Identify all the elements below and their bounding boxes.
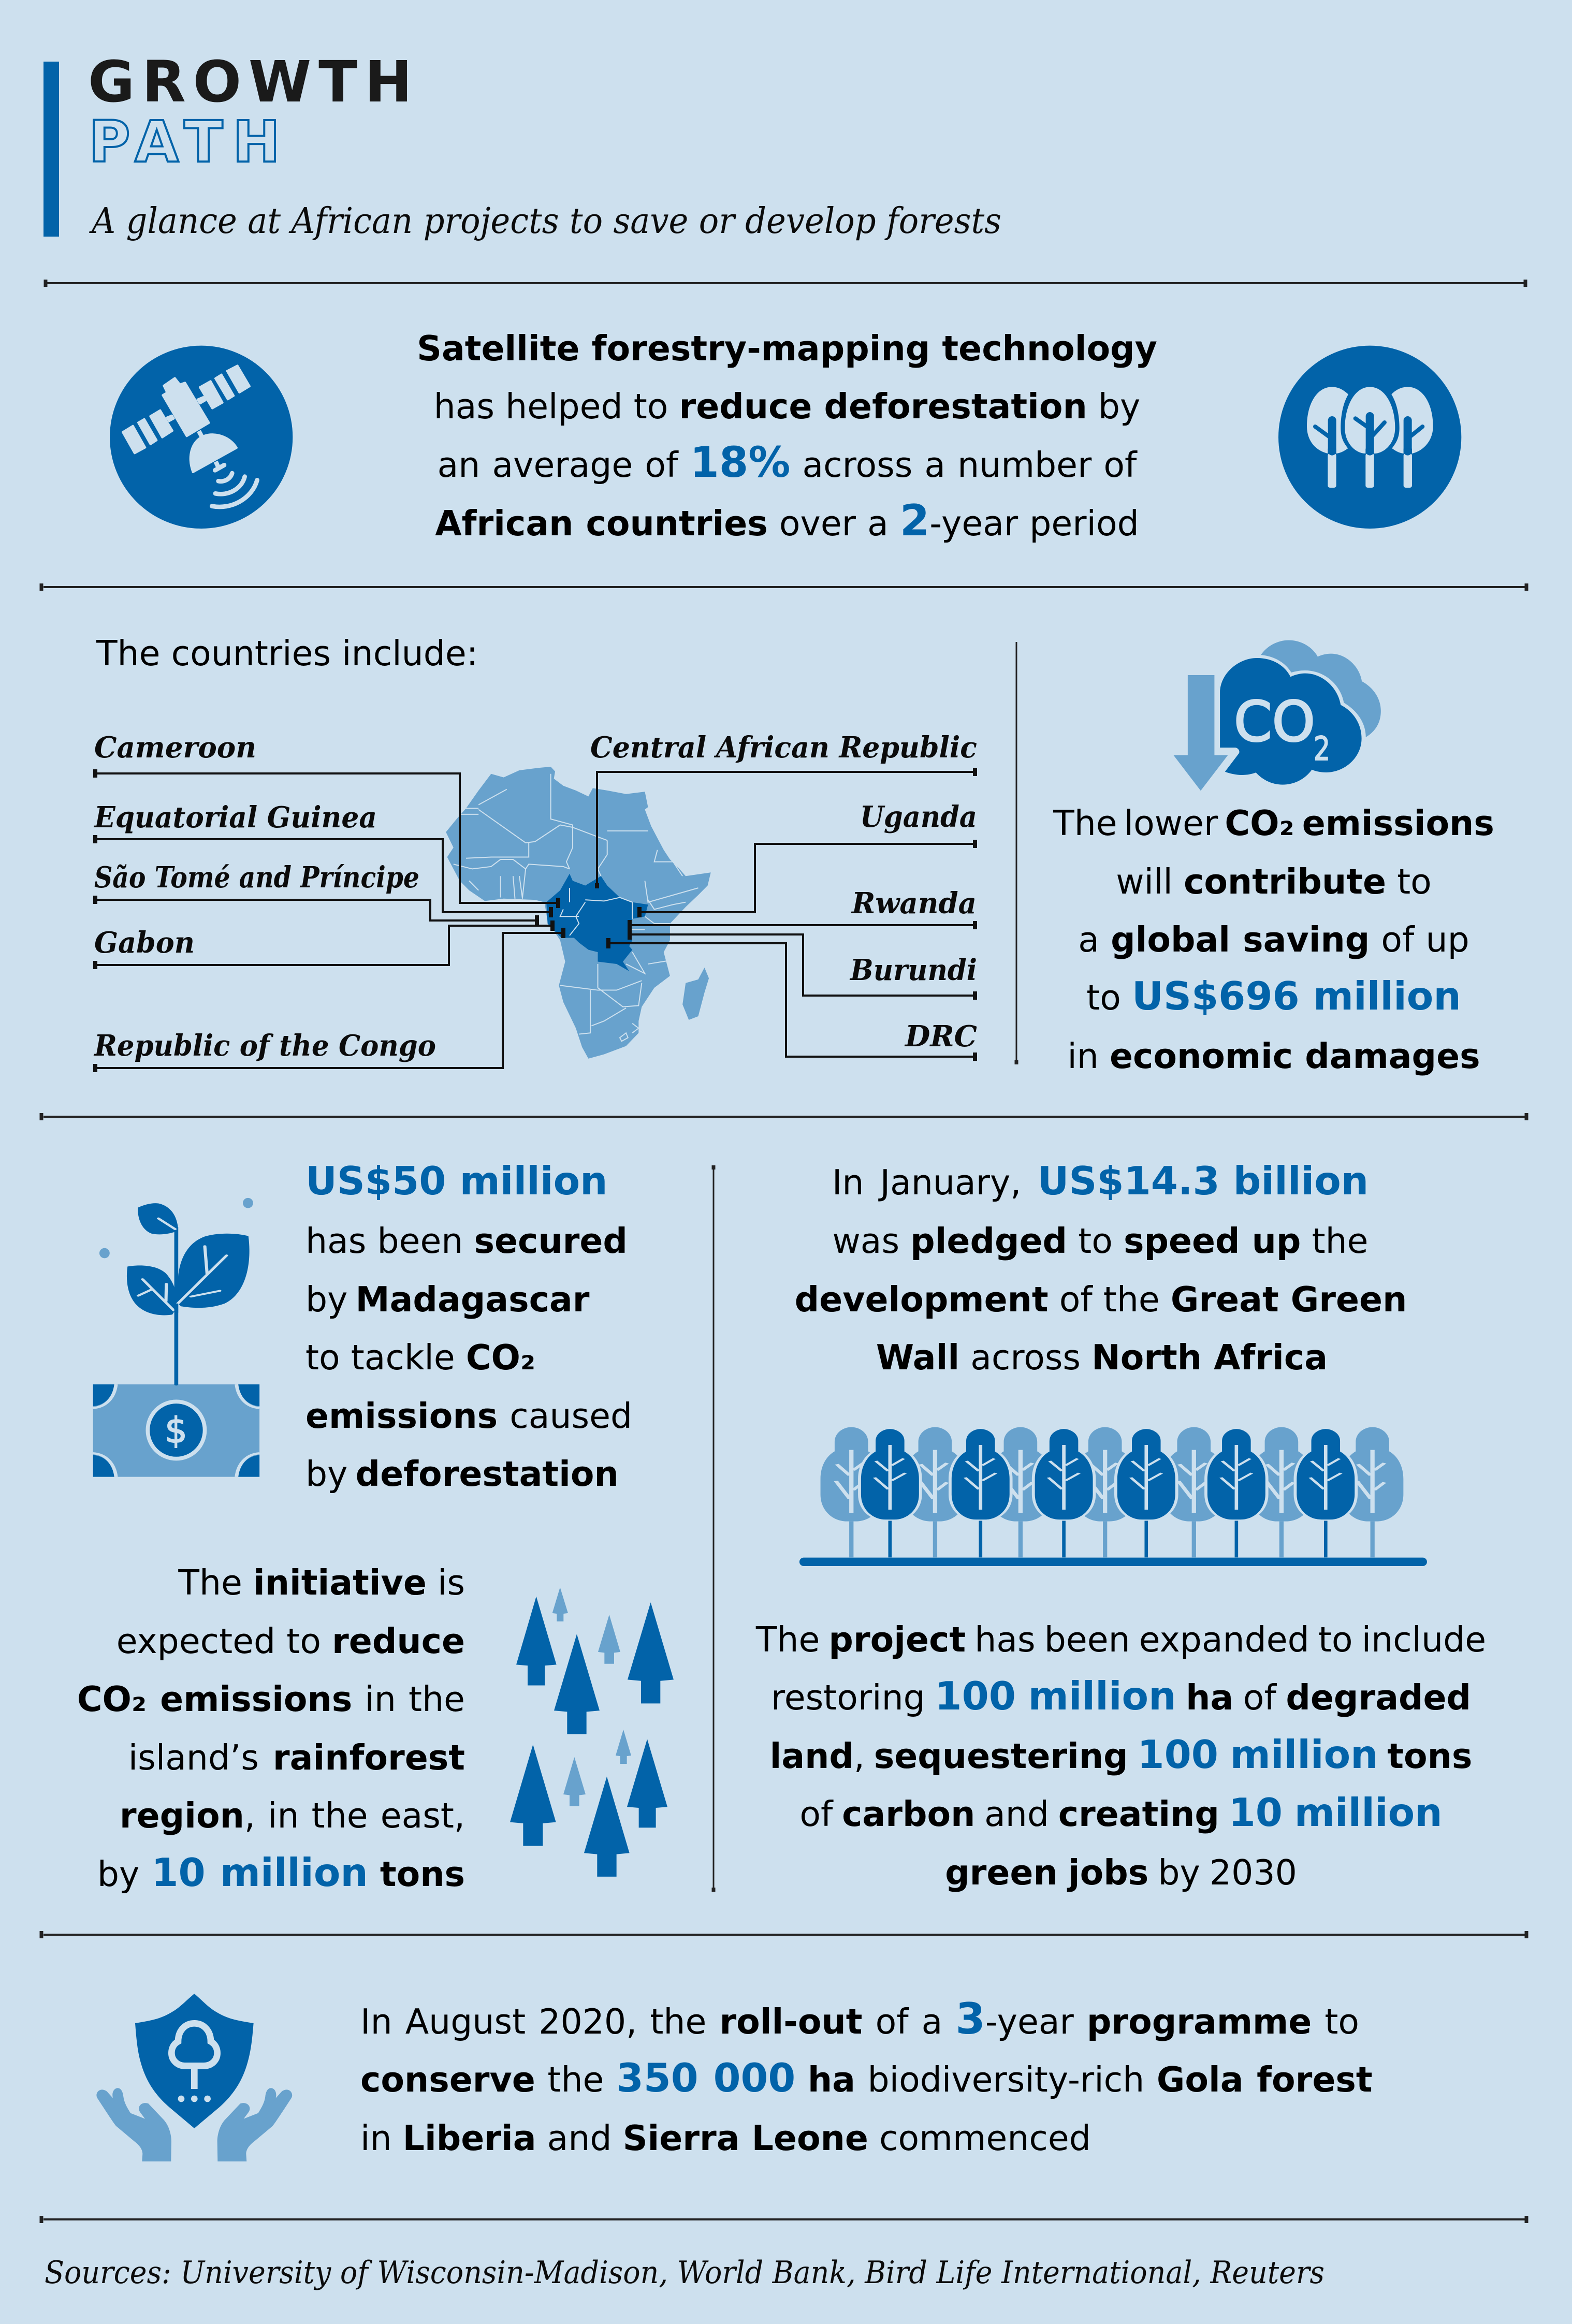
text: Great Green Wall pledge: development of the Great Green <box>795 1279 1407 1320</box>
label: Burundi: Burundi <box>849 953 977 987</box>
text: Gola forest: In August 2020, the roll-out of a 3-year programme to <box>360 1994 1359 2044</box>
text: CO2 savings: will contribute to <box>1116 861 1432 902</box>
label: DRC: DRC <box>904 1019 977 1054</box>
text: Madagascar funding: US$50 million <box>305 1158 607 1204</box>
text: Gola forest <box>360 1994 1373 2158</box>
text: project expansion: of carbon and creating 10 million <box>799 1790 1443 1835</box>
text: Gola forest: in Liberia and Sierra Leone commenced <box>360 2118 1091 2158</box>
label: Central African Republic <box>590 730 977 888</box>
text: satellite technology: an average of 18% across a number of <box>438 439 1138 487</box>
label: São Tomé and Príncipe <box>93 860 539 926</box>
text: initiative: CO₂ emissions in the <box>77 1679 465 1719</box>
sources: Sources: University of Wisconsin-Madison, World Bank, Bird Life International, Reuters <box>45 2255 1324 2291</box>
icon: plant growing from money: $ <box>165 1410 187 1451</box>
title block <box>43 49 1001 242</box>
text: Madagascar funding: by deforestation <box>305 1454 619 1494</box>
text: Madagascar funding: to tackle CO₂ <box>305 1337 535 1378</box>
title block: A glance at African projects to save or develop forests <box>89 201 1001 242</box>
label: Cameroon: Cameroon <box>94 730 256 765</box>
text: Great Green Wall pledge: In January, US$14.3 billion <box>832 1158 1369 1204</box>
text: initiative: region, in the east, <box>120 1795 465 1836</box>
icon: CO2 cloud and arrow: CO <box>1234 690 1315 754</box>
text: project expansion <box>755 1619 1486 1893</box>
icon: row of trees on green wall <box>799 1427 1427 1566</box>
label: Central African Republic: Central African Republic <box>590 730 977 765</box>
text: initiative: by 10 million tons <box>97 1850 465 1895</box>
icon: CO2 cloud and arrow: 2 <box>1314 730 1330 768</box>
label: Cameroon <box>93 730 560 908</box>
text: Madagascar funding: emissions caused <box>305 1396 632 1436</box>
text: Great Green Wall pledge: was pledged to speed up the <box>832 1221 1369 1261</box>
text: CO2 savings: in economic damages <box>1067 1036 1480 1076</box>
text: Great Green Wall pledge <box>795 1158 1407 1378</box>
text: satellite technology: Satellite forestry-mapping technology <box>417 328 1157 369</box>
text: project expansion: green jobs by 2030 <box>945 1852 1297 1893</box>
map: Africa <box>446 767 711 1059</box>
text: project expansion: The project has been expanded to include <box>755 1619 1486 1660</box>
text: satellite technology <box>417 328 1157 546</box>
icon: three trees <box>1278 346 1461 529</box>
label: Republic of the Congo <box>93 928 565 1072</box>
label: São Tomé and Príncipe: São Tomé and Príncipe <box>94 860 419 895</box>
label: Gabon <box>93 920 555 969</box>
icon: small trees cluster <box>510 1587 674 1877</box>
label: Rwanda: Rwanda <box>851 886 977 920</box>
icon: satellite <box>110 346 293 529</box>
text: project expansion: restoring 100 million ha of degraded <box>771 1673 1471 1719</box>
text: project expansion: land, sequestering 100 million tons <box>770 1732 1472 1777</box>
text: initiative: island’s rainforest <box>128 1737 465 1778</box>
text: Madagascar funding: has been secured <box>305 1221 628 1261</box>
label: Republic of the Congo: Republic of the Congo <box>93 1029 436 1063</box>
label: Uganda: Uganda <box>860 800 977 834</box>
text: initiative <box>77 1562 465 1895</box>
text: CO2 savings: a global saving of up <box>1078 919 1469 960</box>
icon: CO2 cloud and arrow <box>1173 640 1381 791</box>
title block: PATH <box>89 109 280 175</box>
label: Gabon: Gabon <box>94 926 195 960</box>
text: CO2 savings: The lower CO₂ emissions <box>1053 803 1494 843</box>
text: CO2 savings <box>1053 803 1494 1076</box>
label: Burundi <box>628 929 977 1000</box>
text: satellite technology: African countries over a 2-year period <box>435 496 1139 546</box>
label: Rwanda <box>628 886 977 930</box>
text: Great Green Wall pledge: Wall across North Africa <box>876 1337 1328 1378</box>
text: Gola forest: conserve the 350 000 ha biodiversity-rich Gola forest <box>360 2055 1373 2101</box>
label: Equatorial Guinea <box>93 800 553 917</box>
heading: the countries include: The countries include: <box>96 633 478 674</box>
icon: plant growing from money <box>93 1198 259 1477</box>
text: Madagascar funding: by Madagascar <box>305 1279 590 1320</box>
label: Uganda <box>637 800 977 917</box>
label: DRC <box>606 938 977 1061</box>
title block: GROWTH <box>88 49 412 115</box>
label: Equatorial Guinea: Equatorial Guinea <box>93 800 377 835</box>
text: initiative: expected to reduce <box>117 1621 465 1661</box>
text: CO2 savings: to US$696 million <box>1086 973 1461 1019</box>
text: satellite technology: has helped to reduce deforestation by <box>434 386 1140 427</box>
text: initiative: The initiative is <box>178 1562 465 1603</box>
text: Madagascar funding <box>305 1158 632 1494</box>
icon: shield with tree and hands <box>96 1994 292 2161</box>
